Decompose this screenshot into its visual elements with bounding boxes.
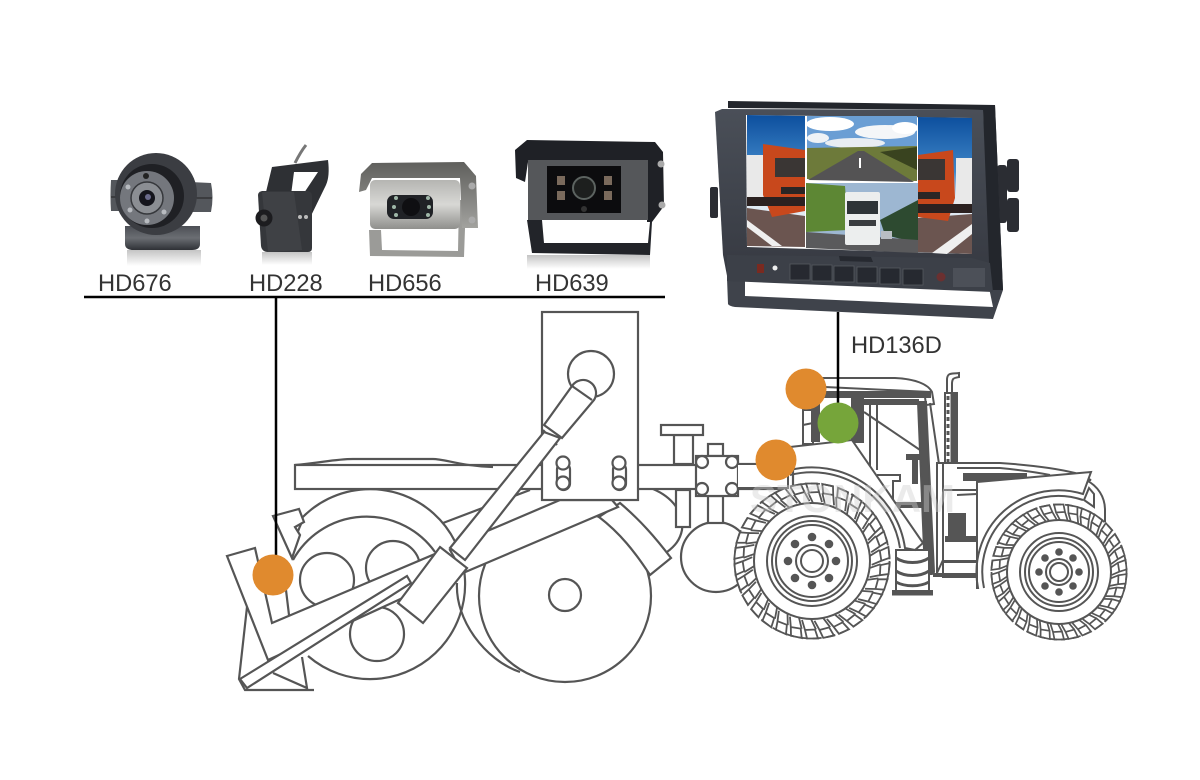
camera marker: implement (252, 554, 294, 596)
large disc wheel with fender (443, 489, 682, 682)
rear fender (738, 440, 923, 550)
hitch tower plate (542, 312, 638, 500)
rear packer drum with inner rollers (286, 489, 465, 679)
tractor cab (803, 378, 939, 574)
tractor line drawing (734, 373, 1127, 640)
label HD639: HD639 (535, 271, 609, 297)
label HD228: HD228 (249, 271, 323, 297)
white truck view (806, 183, 918, 253)
mirrored truck view (918, 117, 972, 254)
monitor connection line (837, 312, 839, 408)
camera marker: cab top (786, 368, 826, 410)
monitor front bezel (715, 109, 990, 288)
camera HD639 (515, 140, 666, 269)
rear wheel (734, 483, 890, 639)
label HD676: HD676 (98, 271, 172, 297)
access steps (893, 550, 932, 594)
hood and engine bay (933, 463, 1091, 577)
label HD656: HD656 (368, 271, 442, 297)
camera HD228 (256, 145, 329, 265)
cab interior controls (877, 455, 923, 507)
road view (806, 116, 918, 182)
camera HD676 (110, 153, 212, 266)
monitor quad view screen (746, 115, 972, 254)
monitor rear housing (728, 101, 1003, 290)
ripper frame and share (227, 509, 467, 690)
drawbar coupler (661, 425, 793, 592)
monitor control strip (727, 255, 993, 292)
left truck view (747, 115, 805, 247)
camera connection bus line (84, 297, 665, 558)
hydraulic arm (450, 380, 596, 560)
camera HD656 (359, 162, 478, 257)
trailed farm implement line drawing (227, 312, 793, 690)
monitor mounting knobs (710, 159, 1019, 232)
front wheel (991, 504, 1127, 640)
watermark: STONKAM (750, 478, 955, 521)
front fender (976, 472, 1091, 588)
monitor marker (818, 402, 858, 444)
camera marker: tractor rear (756, 440, 796, 480)
label HD136D: HD136D (851, 333, 942, 359)
monitor HD136D (710, 101, 1019, 319)
top deck plate (295, 459, 700, 489)
monitor U bracket (727, 105, 1003, 319)
tractor nose (1084, 480, 1105, 522)
exhaust stack (945, 373, 959, 511)
